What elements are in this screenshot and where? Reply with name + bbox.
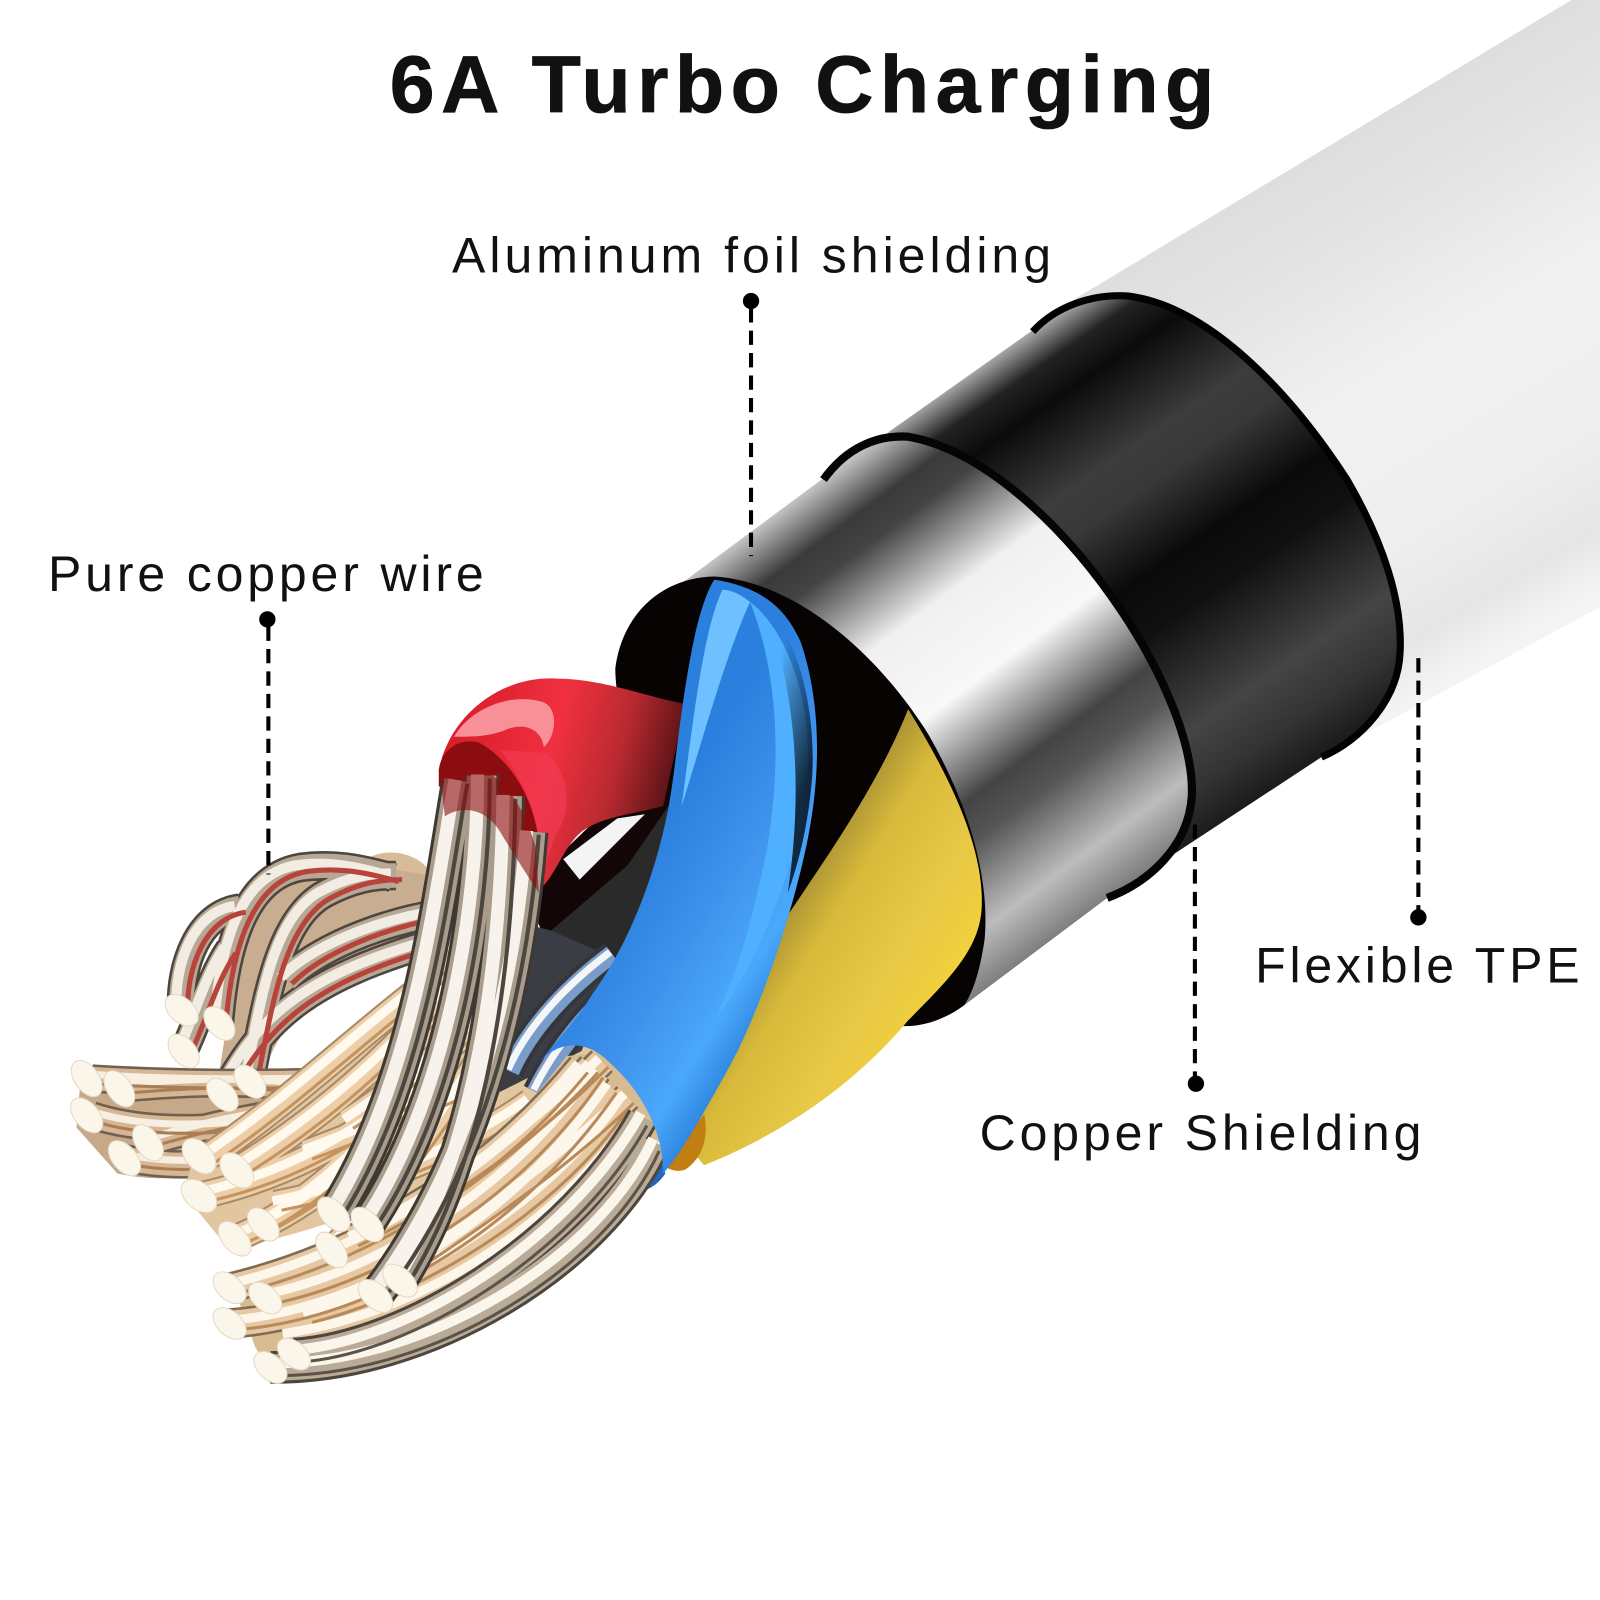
- callout: aluminum foil shielding: Aluminum foil shielding: [452, 227, 1051, 283]
- black insulated wire: [526, 755, 684, 980]
- callout: pure copper wire: Pure copper wire: [48, 546, 484, 602]
- yellow wire: [668, 709, 982, 1165]
- yellow wire mouth: [663, 1114, 706, 1171]
- callout: flexible TPE: [1255, 658, 1580, 994]
- white TPE outer jacket: [1071, 0, 1600, 757]
- left copper strands: [77, 1066, 531, 1178]
- callout: copper shielding: Copper Shielding: [980, 1105, 1421, 1161]
- middle copper strands: [184, 949, 602, 1256]
- callout: pure copper wire: [48, 546, 484, 874]
- back curl of copper strands: [176, 852, 445, 1086]
- red glow on strand roots: [441, 768, 539, 893]
- red wire: [439, 678, 686, 893]
- blue wire: [539, 580, 817, 1173]
- silver strands from red wire: [330, 774, 539, 1299]
- lowest silver strands: [268, 1113, 659, 1376]
- black copper shielding band: [821, 296, 1400, 898]
- copper strands from blue wire: [227, 1051, 663, 1380]
- dark cable opening: [615, 577, 985, 1026]
- callout: copper shielding: [980, 824, 1421, 1161]
- aluminum foil silver band: [684, 437, 1192, 1005]
- wire strand end caps: [64, 988, 423, 1389]
- silver strands near black wire: [500, 918, 628, 1092]
- blue wire mouth back: [539, 1044, 665, 1191]
- title: 6A Turbo Charging: [390, 40, 1214, 130]
- callout: flexible TPE: Flexible TPE: [1255, 938, 1580, 994]
- callout: aluminum foil shielding: [452, 227, 1051, 556]
